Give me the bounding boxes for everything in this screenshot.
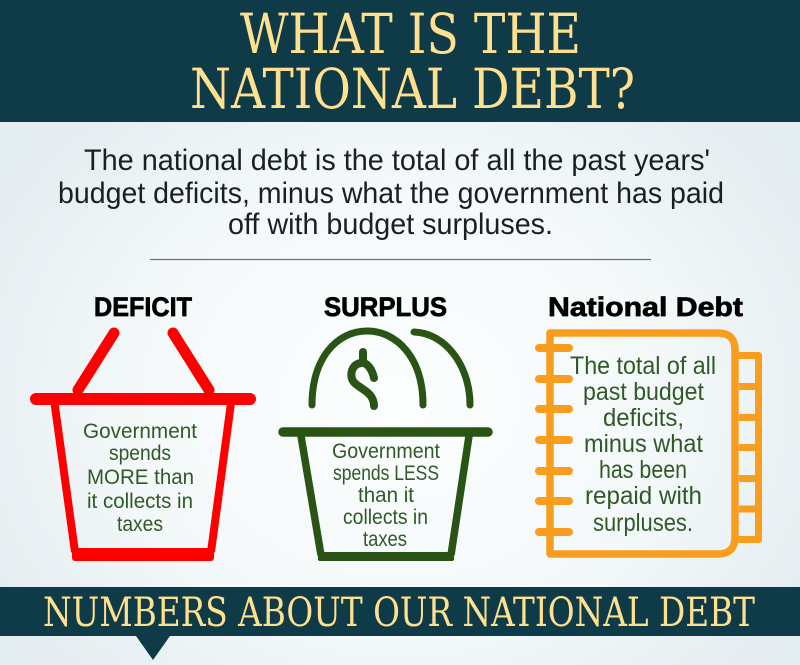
text: surplus definition: than it: [358, 484, 414, 507]
text: national debt definition: past budget: [583, 378, 704, 406]
text: national debt definition: has been: [599, 456, 687, 484]
heading: deficit: DEFICIT: [94, 292, 192, 322]
panel: deficit: [36, 292, 250, 561]
panel: surplus: [283, 292, 488, 561]
icon: green basket with dollar: [283, 331, 488, 561]
heading: surplus: SURPLUS: [324, 292, 447, 322]
text: national debt definition: surpluses.: [593, 509, 693, 537]
text: deficit definition: spends: [109, 442, 171, 465]
text: national debt definition: repaid with: [585, 482, 702, 510]
text: deficit definition: MORE than: [87, 466, 194, 489]
title banner: [0, 0, 800, 122]
text: surplus definition: collects in: [343, 506, 428, 529]
text: surplus definition: Government: [332, 440, 440, 463]
title banner: WHAT IS THE: [240, 2, 581, 66]
text: surplus definition: [332, 440, 440, 551]
text: surplus definition: spends LESS: [333, 462, 439, 485]
intro text: off with budget surpluses.: [228, 208, 553, 241]
text: national debt definition: minus what: [584, 430, 703, 458]
intro text: [58, 144, 724, 241]
text: national debt definition: deficits,: [603, 404, 684, 432]
footer banner: [0, 587, 800, 660]
intro text: budget deficits, minus what the government has paid: [58, 177, 724, 210]
intro text: The national debt is the total of all the past years': [84, 144, 710, 177]
icon: orange notebook: [539, 333, 758, 554]
text: deficit definition: Government: [83, 420, 197, 443]
heading: national debt: National Debt: [548, 292, 743, 322]
text: surplus definition: taxes: [363, 528, 407, 551]
text: national debt definition: [570, 352, 716, 537]
icon: red basket: [36, 333, 250, 561]
text: national debt definition: The total of all: [570, 352, 716, 380]
text: deficit definition: taxes: [117, 513, 163, 536]
text: deficit definition: [83, 420, 197, 536]
title banner: NATIONAL DEBT?: [190, 57, 635, 121]
text: deficit definition: it collects in: [87, 490, 193, 513]
panel: national debt: [539, 292, 758, 554]
